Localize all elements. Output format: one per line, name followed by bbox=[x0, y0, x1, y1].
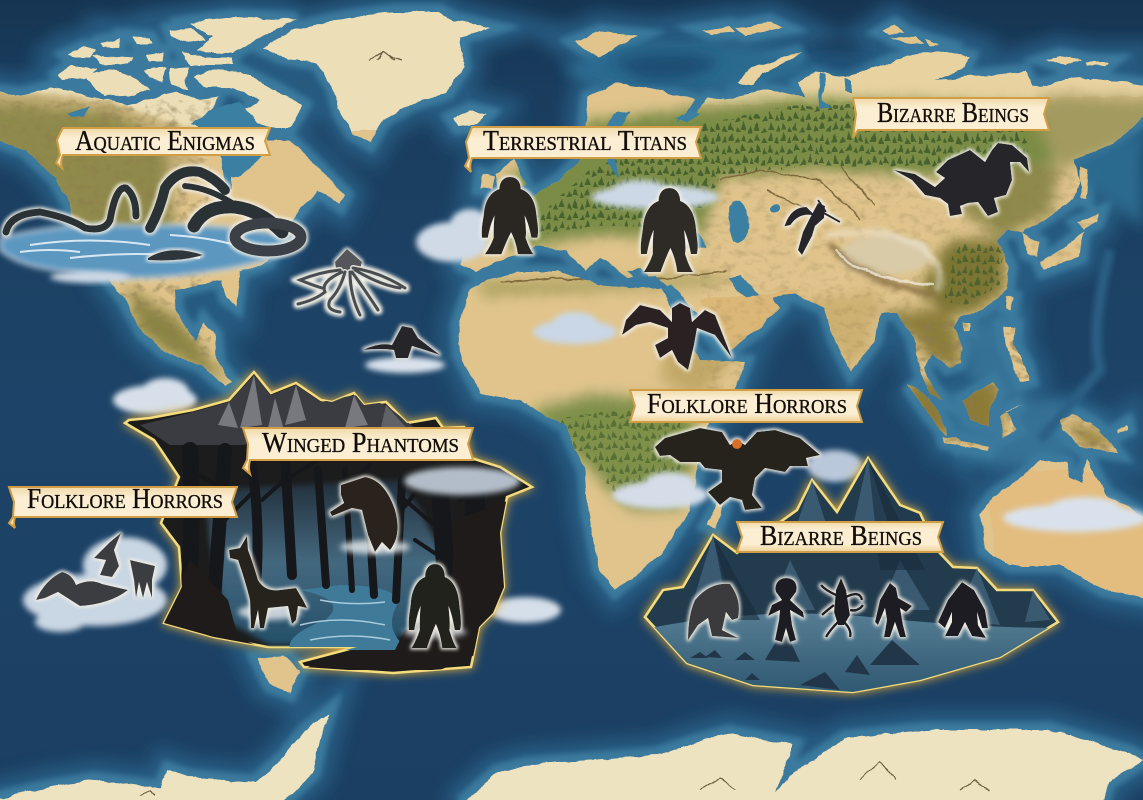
cloud: Iberia bbox=[416, 209, 490, 262]
creature: slim humanoid bbox=[875, 583, 912, 637]
island beast bbox=[36, 572, 128, 606]
label: Terrestrial Titans: Terrestrial Titans bbox=[483, 126, 687, 157]
label: Folklore Horrors right: Folklore Horrors bbox=[647, 389, 847, 420]
cloud: mid-Atlantic left bbox=[113, 378, 197, 415]
creature: hunched beast bbox=[688, 584, 739, 640]
label: Winged Phantoms: Winged Phantoms bbox=[262, 428, 459, 459]
rock islets bbox=[690, 636, 920, 690]
label: Aquatic Enigmas bbox=[56, 126, 270, 168]
inland seas and bays bbox=[68, 74, 852, 358]
cloud: Sahara bbox=[533, 312, 617, 344]
cloud: Australia bbox=[1003, 497, 1143, 532]
panel: dark forest bbox=[125, 372, 532, 673]
lake floor bbox=[654, 614, 1048, 692]
cloud: Africa south bbox=[612, 472, 708, 509]
creature: winged horror bbox=[622, 303, 732, 370]
creature: small flyer bbox=[363, 326, 440, 358]
creature: forest ape bbox=[409, 564, 461, 648]
label: Aquatic Enigmas: Aquatic Enigmas bbox=[75, 126, 255, 157]
stilt creature bbox=[130, 560, 155, 598]
creature: great bird bbox=[655, 428, 820, 510]
misty clearing bbox=[205, 480, 450, 645]
mist top right bbox=[404, 467, 520, 495]
creature: tentacle figure bbox=[821, 578, 863, 637]
cloud: right of forest bbox=[489, 597, 561, 623]
label: Folklore Horrors left: Folklore Horrors bbox=[27, 484, 223, 515]
label: Bizarre Beings top bbox=[853, 98, 1049, 138]
label: Winged Phantoms bbox=[243, 428, 473, 474]
creature: alien bbox=[768, 578, 804, 642]
serpent hump bbox=[148, 250, 203, 260]
creature group: serpent in lake bbox=[0, 171, 305, 283]
creature: dragon bbox=[894, 143, 1029, 216]
panel: bizarre mountains bbox=[640, 458, 1060, 700]
creatures: folklore trio bbox=[36, 533, 155, 606]
lake bbox=[0, 225, 305, 278]
cloud: small flyer bbox=[365, 357, 445, 373]
cloud: folklore group bbox=[23, 537, 167, 632]
label: Folklore Horrors left bbox=[9, 484, 237, 528]
creature: hulking figure bbox=[938, 582, 988, 638]
dark root bank bbox=[160, 500, 510, 670]
label: Bizarre Beings top: Bizarre Beings bbox=[877, 98, 1029, 129]
mountains bbox=[140, 375, 420, 445]
label: Bizarre Beings bottom: Bizarre Beings bbox=[760, 521, 922, 552]
cloud: behind bird bbox=[807, 450, 863, 482]
creature: squid bbox=[298, 249, 405, 315]
creature: ape Turkey bbox=[641, 188, 698, 272]
river bbox=[289, 585, 410, 650]
trees bbox=[160, 450, 500, 640]
label: Terrestrial Titans bbox=[465, 126, 701, 172]
serpents bbox=[6, 171, 301, 251]
cloud under lake bbox=[50, 271, 130, 283]
cloud: Europe bbox=[591, 180, 719, 209]
creature: giraffe-like beast bbox=[229, 536, 307, 628]
small witch bbox=[94, 533, 121, 577]
creature: crouching monster bbox=[330, 477, 398, 552]
creature: leaping figure bbox=[786, 200, 840, 255]
creature: ape Iberia bbox=[482, 177, 538, 254]
mountains bbox=[690, 458, 1050, 625]
